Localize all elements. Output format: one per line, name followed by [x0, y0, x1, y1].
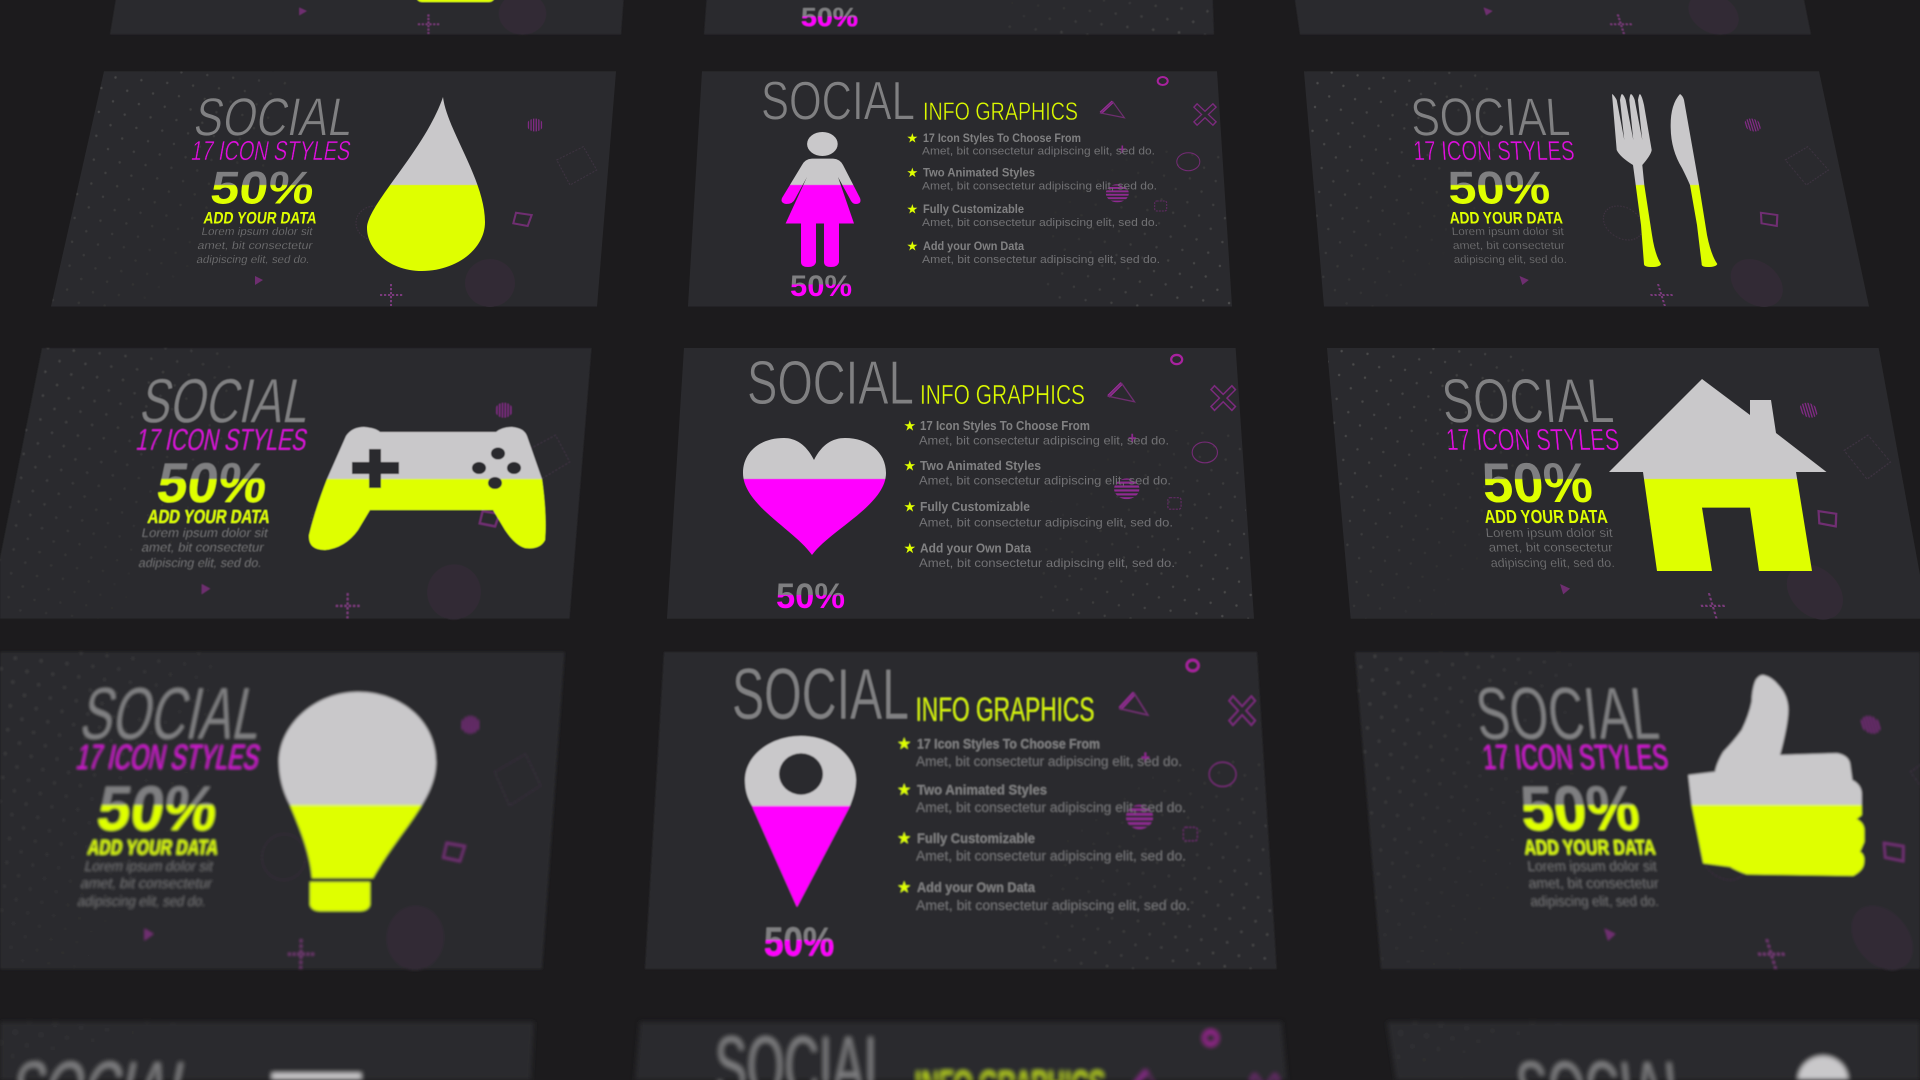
body text: amet, bit consectetur	[196, 240, 314, 252]
panel: bottom row middle (cropped)	[635, 1019, 1287, 1080]
feature list: ★	[897, 734, 911, 753]
feature list: Amet, bit consectetur adipiscing elit, sed do.	[919, 556, 1175, 570]
feature list: Fully Customizable	[923, 204, 1024, 216]
icon: game controller 50% fill	[309, 427, 546, 550]
feature list: Amet, bit consectetur adipiscing elit, sed do.	[916, 800, 1186, 815]
panel: fork and knife	[1304, 71, 1871, 307]
percentage: 50%	[776, 577, 845, 616]
panel: water drop	[51, 71, 616, 307]
feature list: Two Animated Styles	[917, 782, 1047, 798]
feature list: ★	[906, 202, 918, 218]
data label: ADD YOUR DATA	[1523, 837, 1656, 859]
body text: adipiscing elit, sed do.	[1453, 254, 1567, 266]
panel: top row right (cropped)	[1292, 0, 1824, 35]
body text	[195, 226, 314, 266]
heading: SOCIAL	[1439, 367, 1616, 436]
feature list: Amet, bit consectetur adipiscing elit, sed do.	[919, 474, 1171, 488]
icon: water drop 50% fill	[367, 97, 485, 271]
decorative shapes	[1471, 118, 1871, 307]
feature list: Amet, bit consectetur adipiscing elit, sed do.	[919, 516, 1173, 530]
data label: ADD YOUR DATA	[202, 209, 318, 227]
subheading: INFO GRAPHICS	[923, 99, 1078, 126]
data label: ADD YOUR DATA	[1449, 209, 1563, 227]
feature list: ★	[904, 500, 916, 516]
body text: adipiscing elit, sed do.	[137, 556, 263, 570]
body text	[76, 859, 214, 910]
feature list: 17 Icon Styles To Choose From	[920, 419, 1090, 433]
body text: Lorem ipsum dolor sit	[1451, 226, 1564, 238]
icon: house 50% fill	[1609, 379, 1826, 571]
icon: cropped gray circle	[1798, 1056, 1848, 1080]
data label: ADD YOUR DATA	[1484, 507, 1609, 528]
icon: thumbs up 50% fill	[1688, 675, 1864, 876]
body text: adipiscing elit, sed do.	[76, 894, 207, 910]
body text: Lorem ipsum dolor sit	[1527, 859, 1657, 875]
feature list	[906, 132, 1160, 266]
panel: light bulb	[0, 652, 565, 970]
icon: cropped lime shape	[416, 0, 495, 2]
feature list: 17 Icon Styles To Choose From	[917, 736, 1100, 752]
decorative shapes	[1483, 7, 1722, 34]
percentage: 50%	[93, 774, 222, 844]
feature list: Fully Customizable	[920, 500, 1030, 514]
panel: house	[1327, 348, 1920, 620]
feature list: Amet, bit consectetur adipiscing elit, sed do.	[916, 754, 1182, 769]
feature list: Amet, bit consectetur adipiscing elit, sed do.	[922, 217, 1158, 229]
body text: Lorem ipsum dolor sit	[83, 859, 214, 875]
body text: adipiscing elit, sed do.	[1530, 894, 1659, 910]
feature list: Two Animated Styles	[923, 168, 1035, 180]
decorative shapes	[1540, 716, 1920, 970]
panel: game controller	[0, 348, 592, 620]
icon: fork and knife 50% fill	[1612, 94, 1717, 267]
feature list: ★	[904, 458, 916, 474]
feature list: ★	[906, 132, 918, 146]
feature list: Amet, bit consectetur adipiscing elit, sed do.	[922, 254, 1160, 266]
icon: person 50% fill	[782, 132, 860, 267]
feature list: Add your Own Data	[920, 542, 1032, 556]
feature list: ★	[897, 878, 911, 896]
feature list: ★	[904, 418, 916, 434]
body text: amet, bit consectetur	[1528, 876, 1660, 892]
feature list: Amet, bit consectetur adipiscing elit, sed do.	[922, 180, 1157, 192]
percentage: 50%	[764, 918, 834, 964]
heading: SOCIAL	[747, 349, 914, 418]
body text: amet, bit consectetur	[1488, 541, 1613, 554]
panel: map pin	[645, 652, 1277, 969]
feature list: Amet, bit consectetur adipiscing elit, sed do.	[922, 146, 1155, 158]
panel: bottom row right (cropped)	[1387, 1022, 1920, 1080]
decorative shapes	[1506, 403, 1920, 620]
feature list: Amet, bit consectetur adipiscing elit, sed do.	[916, 898, 1190, 913]
feature list: ★	[906, 240, 918, 254]
icon: map pin 50% fill	[745, 736, 856, 907]
icon: cropped gray shape	[272, 1073, 361, 1080]
decorative shapes	[144, 716, 542, 970]
feature list: ★	[897, 828, 911, 848]
body text	[137, 526, 270, 570]
panel: top row middle (cropped)	[704, 0, 1214, 34]
body text: adipiscing elit, sed do.	[195, 254, 311, 266]
decorative shapes	[1101, 77, 1215, 211]
subheading: 17 ICON STYLES	[73, 738, 263, 777]
feature list: Amet, bit consectetur adipiscing elit, sed do.	[919, 434, 1169, 448]
icon: light bulb 50% fill	[279, 692, 436, 911]
body text	[1527, 859, 1660, 910]
feature list: Add your Own Data	[917, 880, 1035, 895]
body text: amet, bit consectetur	[1452, 240, 1566, 252]
decorative shapes	[1120, 660, 1254, 841]
subheading: 17 ICON STYLES	[189, 135, 353, 166]
feature list	[904, 418, 1175, 570]
subheading: INFO GRAPHICS	[916, 691, 1094, 729]
panel: top row left (cropped)	[110, 0, 625, 35]
data label: ADD YOUR DATA	[146, 507, 272, 528]
percentage: 50%	[1517, 774, 1642, 844]
feature list: 17 Icon Styles To Choose From	[923, 133, 1081, 145]
percentage: 50%	[790, 270, 852, 303]
heading: SOCIAL	[732, 655, 909, 735]
subheading: INFO GRAPHICS	[920, 379, 1085, 410]
percentage: 50%	[208, 162, 317, 213]
icon: heart 50% fill	[743, 438, 886, 555]
heading: SOCIAL	[190, 87, 359, 147]
feature list: Amet, bit consectetur adipiscing elit, sed do.	[916, 848, 1186, 864]
panel: heart	[667, 348, 1254, 619]
body text: amet, bit consectetur	[79, 876, 214, 892]
feature list: Add your Own Data	[923, 241, 1025, 253]
heading: SOCIAL	[135, 366, 317, 436]
body text	[1451, 226, 1567, 266]
percentage: 50%	[153, 451, 272, 514]
feature list: ★	[897, 780, 911, 799]
subheading: 17 ICON STYLES	[1481, 738, 1670, 777]
percentage: 50%	[1446, 162, 1552, 213]
body text: adipiscing elit, sed do.	[1490, 556, 1615, 570]
decorative shapes	[1131, 1032, 1278, 1080]
feature list: ★	[906, 166, 918, 181]
panel: person	[688, 71, 1232, 306]
heading: SOCIAL	[1409, 88, 1572, 147]
feature list: Fully Customizable	[917, 831, 1035, 846]
feature list	[897, 734, 1190, 913]
decorative shapes	[298, 7, 524, 34]
body text: Lorem ipsum dolor sit	[140, 526, 270, 540]
subheading: 17 ICON STYLES	[134, 422, 311, 457]
subheading: 17 ICON STYLES	[1445, 423, 1621, 457]
heading: SOCIAL	[761, 71, 915, 132]
body text: Lorem ipsum dolor sit	[200, 226, 314, 238]
body text	[1485, 526, 1615, 570]
body text: amet, bit consectetur	[140, 541, 265, 554]
panel: thumbs up	[1355, 652, 1920, 970]
heading: SOCIAL	[75, 672, 271, 755]
data label: ADD YOUR DATA	[86, 837, 220, 859]
percentage: 50%	[1479, 451, 1595, 514]
decorative shapes	[1108, 355, 1234, 509]
subheading: 17 ICON STYLES	[1412, 135, 1575, 166]
decorative shapes	[255, 118, 597, 307]
feature list: ★	[904, 541, 916, 557]
decorative shapes	[201, 403, 570, 620]
body text: Lorem ipsum dolor sit	[1485, 526, 1614, 540]
percentage: 50%	[801, 2, 858, 32]
heading: SOCIAL	[1472, 672, 1663, 755]
panel: bottom row left (cropped)	[0, 1022, 534, 1080]
feature list: Two Animated Styles	[920, 459, 1041, 473]
